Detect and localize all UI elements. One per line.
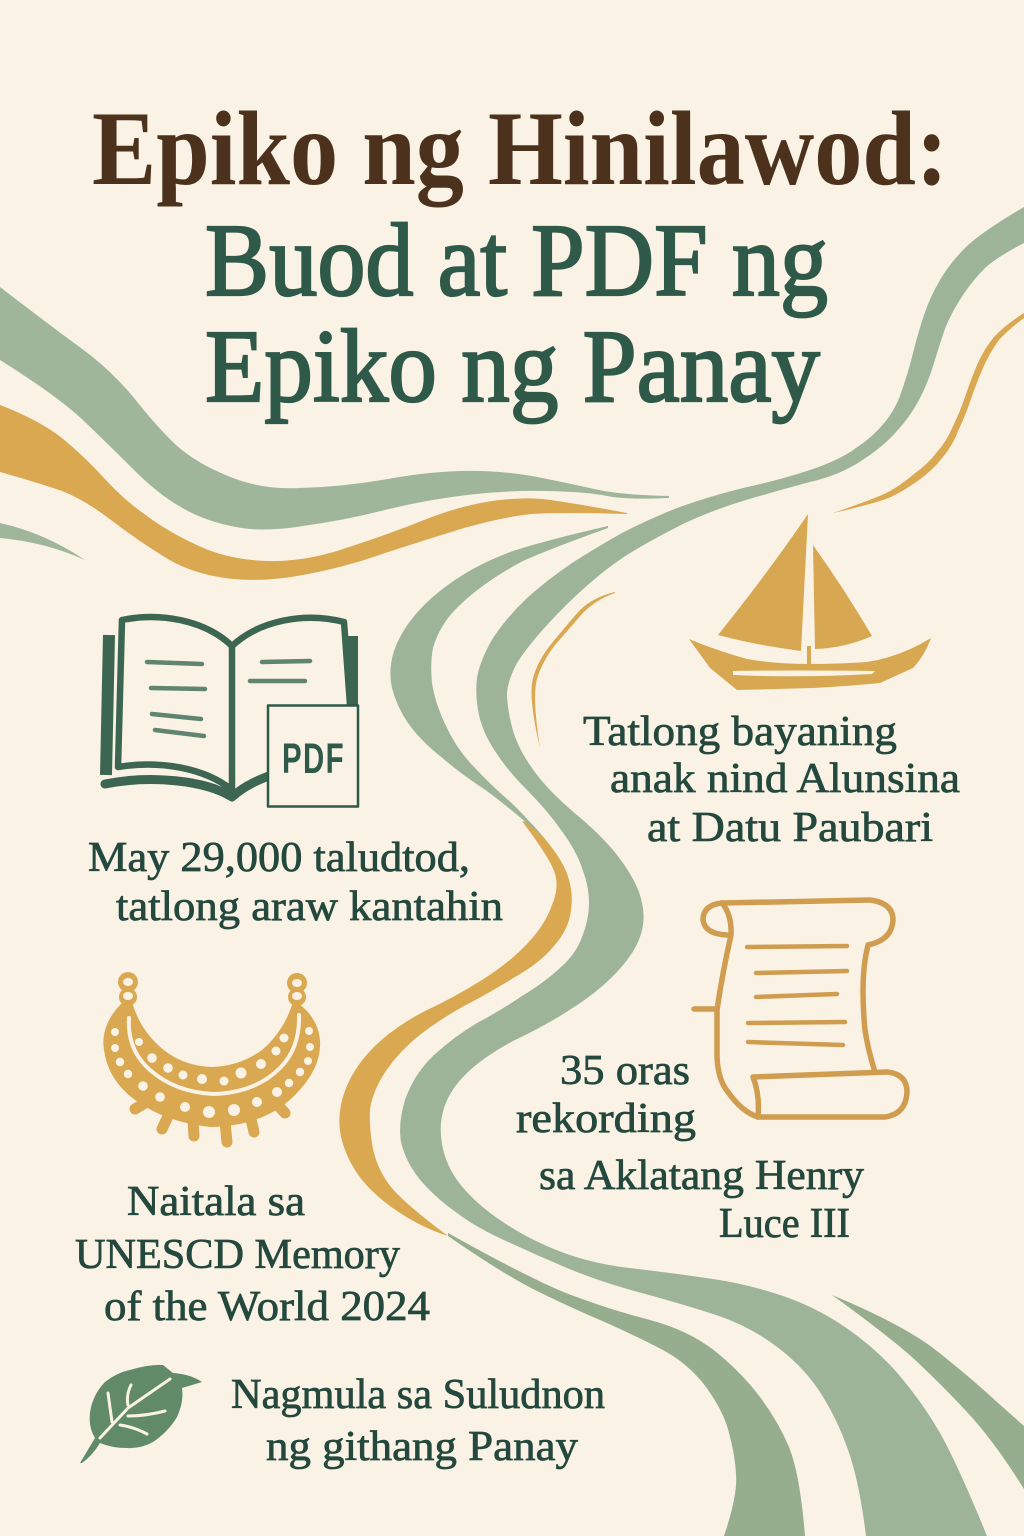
icon: gold necklace xyxy=(103,972,320,1142)
text: recording: Luce III xyxy=(719,1201,850,1247)
text: UNESCO listing: Naitala sa xyxy=(127,1179,305,1225)
text: UNESCO listing xyxy=(75,1179,430,1330)
text: origin: ng githang Panay xyxy=(266,1424,578,1470)
text: verses xyxy=(88,835,503,930)
icon: leaf xyxy=(80,1365,202,1463)
river: small left sliver xyxy=(0,523,85,560)
icon: boat xyxy=(689,514,931,690)
PDF page xyxy=(268,706,358,806)
PDF page: PDF xyxy=(282,735,345,783)
river: upper left green band xyxy=(0,287,669,530)
river: main winding green band xyxy=(400,207,1024,1536)
text: UNESCO listing: UNESCD Memory xyxy=(75,1232,400,1278)
text: recording: rekording xyxy=(516,1096,696,1142)
icon: open book with PDF page xyxy=(105,617,358,806)
river: lower right green band xyxy=(832,1295,1024,1489)
text: recording: sa Aklatang Henry xyxy=(539,1153,864,1199)
text: UNESCO listing: of the World 2024 xyxy=(104,1284,430,1330)
text: heroes: Tatlong bayaning xyxy=(583,709,897,755)
text: origin xyxy=(231,1372,605,1470)
title line 1: Epiko ng Hinilawod: xyxy=(92,90,948,207)
river: left green band tapering into gold xyxy=(390,526,608,837)
title xyxy=(92,90,948,424)
text: recording xyxy=(516,1048,864,1247)
text: recording: 35 oras xyxy=(560,1048,690,1094)
river: thin gold stream upper right xyxy=(833,313,1024,513)
river: upper left gold band xyxy=(0,405,627,580)
icon: scroll xyxy=(694,900,907,1117)
river: thin gold stream near boat xyxy=(532,592,615,748)
title line 2: Buod at PDF ng xyxy=(205,203,828,318)
river: lower green band xyxy=(448,1233,805,1536)
text: heroes xyxy=(583,709,960,851)
text: heroes: anak nind Alunsina xyxy=(610,756,960,802)
text: heroes: at Datu Paubari xyxy=(647,805,933,851)
title line 3: Epiko ng Panay xyxy=(205,309,820,424)
text: verses: tatlong araw kantahin xyxy=(116,884,503,930)
text: origin: Nagmula sa Suludnon xyxy=(231,1372,605,1418)
river: winding gold band xyxy=(339,821,572,1236)
text: verses: May 29,000 taludtod, xyxy=(88,835,470,881)
